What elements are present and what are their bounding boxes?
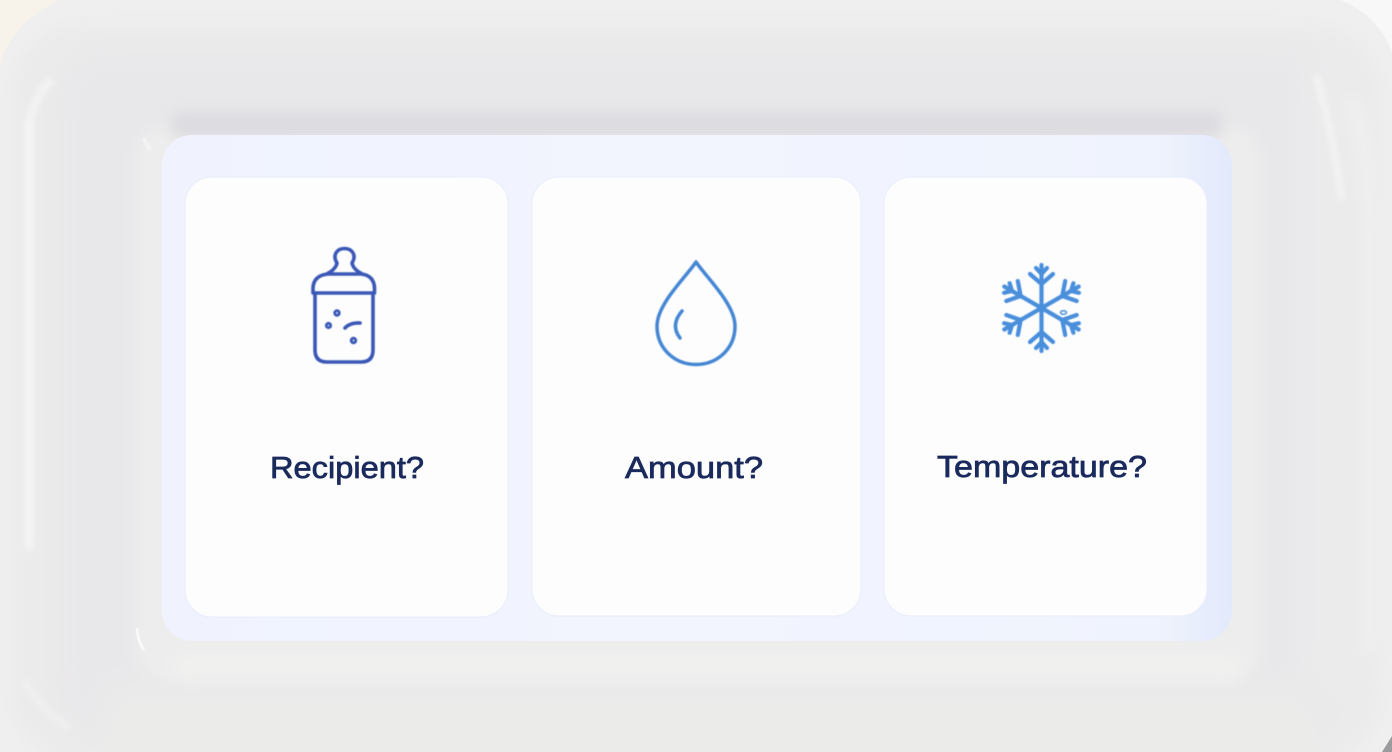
label: Temperature?: Temperature? <box>937 449 1147 484</box>
icon: baby bottle <box>313 248 374 362</box>
panel: inset tray holding the three cards <box>162 135 1232 641</box>
card: temperature <box>884 177 1207 616</box>
icon: snowflake <box>999 265 1084 351</box>
card: recipient <box>185 177 508 617</box>
label: Amount?: Amount? <box>625 450 763 485</box>
icon: water drop <box>657 262 735 364</box>
label: Recipient?: Recipient? <box>270 450 424 485</box>
card: amount <box>532 177 861 616</box>
